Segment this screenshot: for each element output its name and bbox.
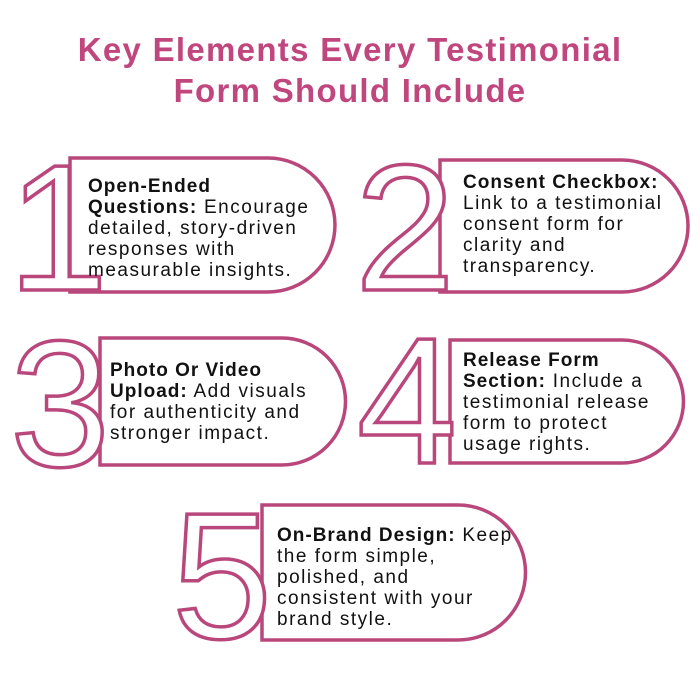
panel: 2 consent checkbox: clarity and bbox=[463, 235, 566, 256]
panel: 5 on-brand design: the form simple, bbox=[277, 546, 436, 567]
title: Key Elements Every Testimonial bbox=[78, 31, 622, 68]
icon: number 3: 3 bbox=[10, 304, 110, 505]
panel: 4 release form section bbox=[357, 301, 683, 502]
icon: number 5: 5 bbox=[172, 476, 272, 677]
panel: 3 photo or video upload bbox=[10, 304, 346, 505]
panel: 5 on-brand design: consistent with your bbox=[277, 588, 474, 609]
title bbox=[78, 31, 622, 109]
panel: 4 release form section: form to protect bbox=[463, 413, 608, 434]
panel: 4 release form section: usage rights. bbox=[463, 434, 591, 455]
panel: 5 on-brand design: On-Brand Design: Keep bbox=[277, 525, 513, 546]
icon: number 2: 2 bbox=[355, 128, 455, 329]
panel: 5 on-brand design: polished, and bbox=[277, 567, 410, 588]
panel: 3 photo or video upload: for authenticity and bbox=[110, 402, 301, 423]
icon: number 1: 1 bbox=[8, 128, 108, 329]
panel: 5 on-brand design: brand style. bbox=[277, 609, 393, 630]
panel: 5 on-brand design bbox=[172, 476, 526, 677]
panel: 3 photo or video upload: Upload: Add visuals bbox=[110, 381, 307, 402]
panel: 2 consent checkbox: Consent Checkbox: bbox=[463, 172, 658, 193]
title: Form Should Include bbox=[174, 72, 526, 109]
panel: 2 consent checkbox bbox=[355, 128, 688, 329]
panel: 2 consent checkbox: Link to a testimonial bbox=[463, 193, 662, 214]
icon: number 4: 4 bbox=[357, 301, 457, 502]
panel: 1 open-ended questions: detailed, story-driven bbox=[88, 218, 297, 239]
panel: 1 open-ended questions: Questions: Encourage bbox=[88, 197, 309, 218]
panel: 1 open-ended questions: responses with bbox=[88, 239, 236, 260]
panel: 2 consent checkbox: transparency. bbox=[463, 256, 596, 277]
panel: 1 open-ended questions bbox=[8, 128, 335, 329]
panel: 3 photo or video upload: Photo Or Video bbox=[110, 360, 262, 381]
panel: 1 open-ended questions: Open-Ended bbox=[88, 176, 211, 197]
panel: 4 release form section: testimonial release bbox=[463, 392, 650, 413]
panel: 4 release form section: Section: Include a bbox=[463, 371, 643, 392]
panel: 1 open-ended questions: measurable insights. bbox=[88, 260, 292, 281]
panel: 3 photo or video upload: stronger impact. bbox=[110, 423, 270, 444]
panel: 4 release form section: Release Form bbox=[463, 350, 600, 371]
panel: 2 consent checkbox: consent form for bbox=[463, 214, 624, 235]
